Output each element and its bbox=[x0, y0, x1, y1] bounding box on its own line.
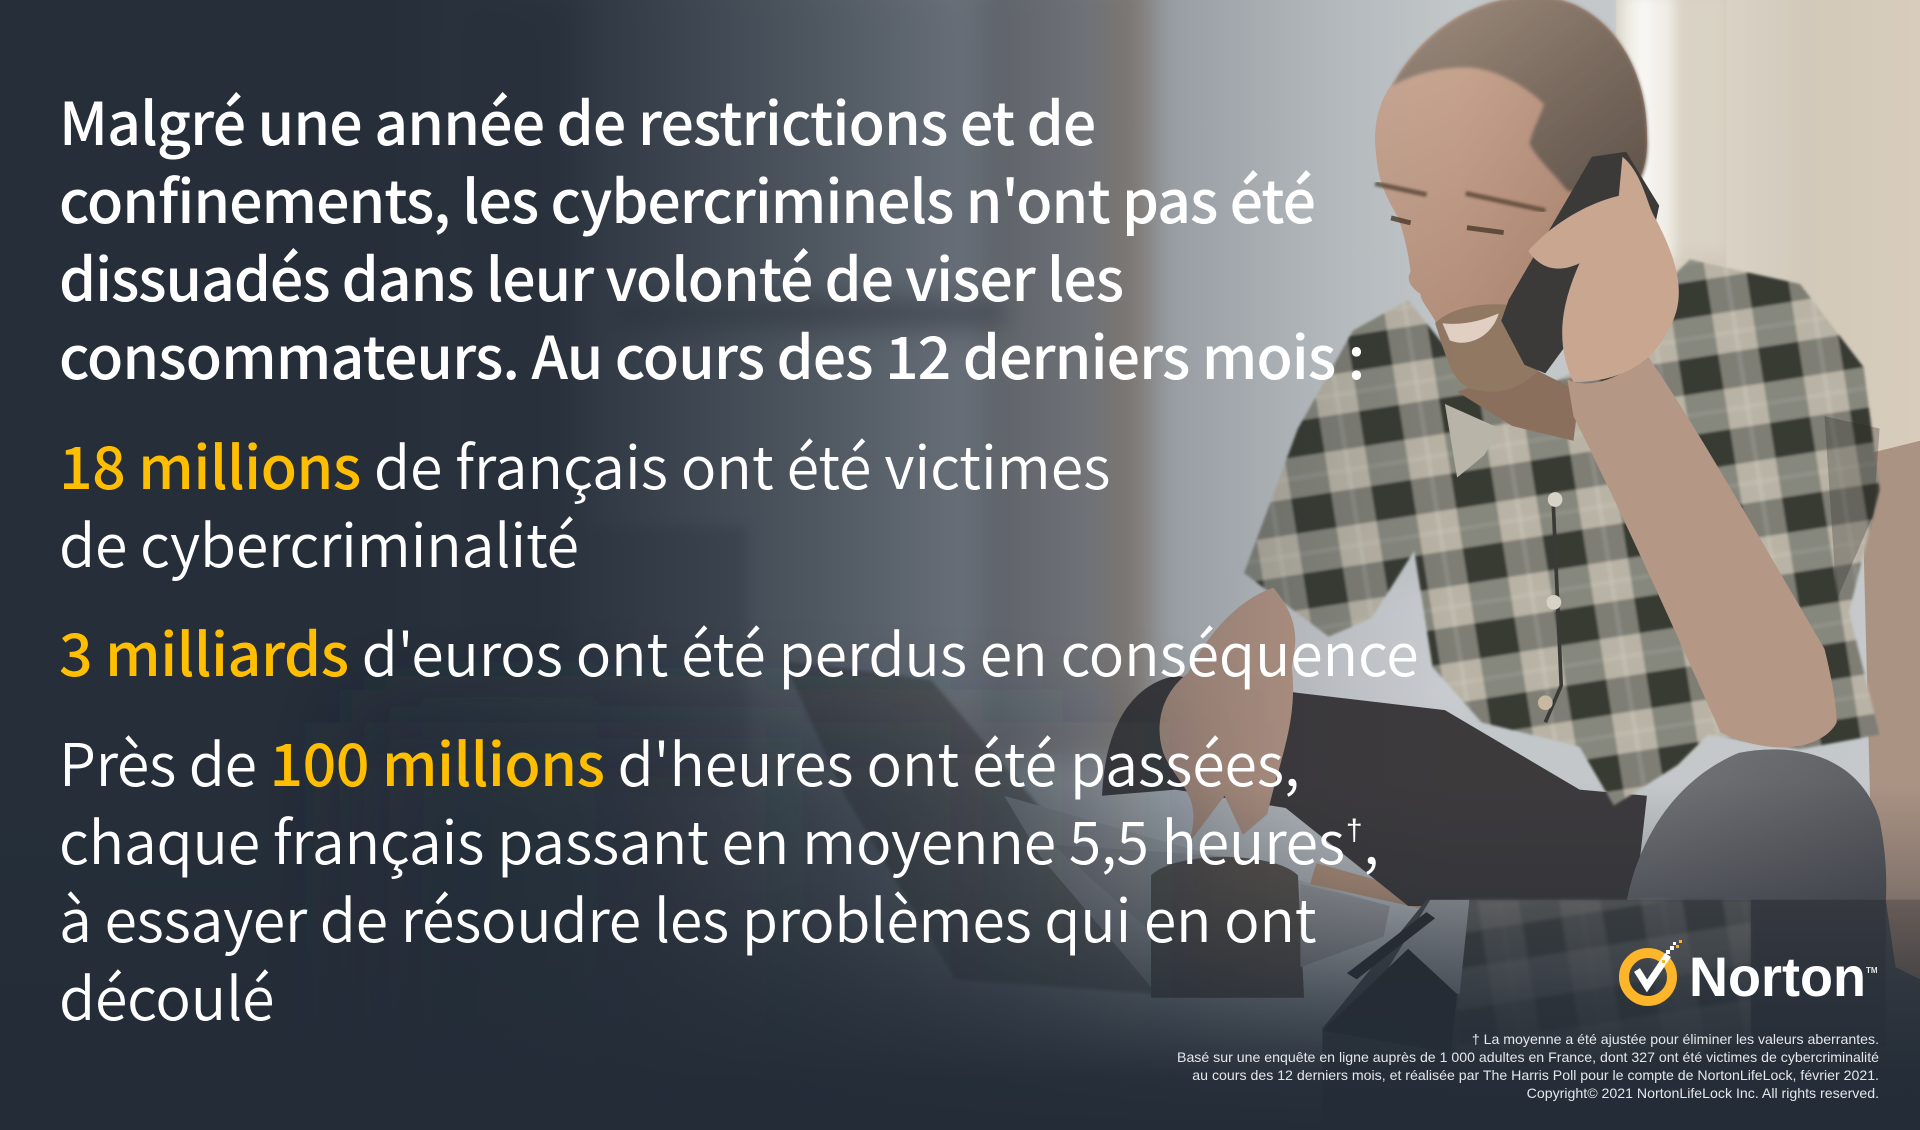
logo wordmark: Norton bbox=[1689, 945, 1866, 1008]
footnotes: Copyright© 2021 NortonLifeLock Inc. All rights reserved. bbox=[1527, 1085, 1879, 1101]
man: phone bbox=[1501, 152, 1659, 373]
text: 18 millions de français ont été victimes bbox=[59, 421, 1110, 506]
logo pixels bbox=[1665, 942, 1676, 959]
logo pixel accents bbox=[1662, 940, 1682, 963]
man: head bbox=[1375, 0, 1647, 392]
laptop and desk bbox=[588, 526, 1439, 998]
glass table with reflection bbox=[1322, 900, 1920, 1130]
text: Près de 100 millions d'heures ont été passées, bbox=[59, 718, 1300, 803]
footnotes bbox=[1177, 1031, 1879, 1101]
stat: 100 millions bbox=[59, 718, 1379, 1037]
man: bare forearms bbox=[1160, 355, 1837, 845]
headline block bbox=[59, 77, 1364, 396]
text: de cybercriminalité bbox=[59, 499, 579, 584]
text: chaque français passant en moyenne 5,5 heures†, bbox=[59, 796, 1379, 881]
man: checked shirt bbox=[1244, 260, 1880, 806]
man: trousers bbox=[1102, 676, 1886, 967]
text: consommateurs. Au cours des 12 derniers mois : bbox=[59, 311, 1364, 396]
logo check mark bbox=[1637, 955, 1668, 986]
trademark: TM bbox=[1866, 966, 1878, 975]
footnotes: † La moyenne a été ajustée pour éliminer les valeurs aberrantes. bbox=[1472, 1031, 1879, 1047]
text: 3 milliards d'euros ont été perdus en conséquence bbox=[59, 608, 1418, 693]
footnotes: Basé sur une enquête en ligne auprès de 1 000 adultes en France, dont 327 ont été victimes de cybercriminalité bbox=[1177, 1049, 1879, 1065]
text: découlé bbox=[59, 952, 274, 1037]
man: neck bbox=[1457, 367, 1580, 441]
text: dissuadés dans leur volonté de viser les bbox=[59, 233, 1123, 318]
footnotes: au cours des 12 derniers mois, et réalisée par The Harris Poll pour le compte de NortonLifeLock, février 2021. bbox=[1192, 1067, 1879, 1083]
stat: 18 millions bbox=[59, 421, 1110, 584]
text: confinements, les cybercriminels n'ont pas été bbox=[59, 155, 1315, 240]
text: Malgré une année de restrictions et de bbox=[59, 77, 1095, 162]
text: à essayer de résoudre les problèmes qui en ont bbox=[59, 874, 1316, 959]
logo ring bbox=[1624, 953, 1672, 1001]
man: hand holding phone bbox=[1528, 157, 1679, 382]
dark overlay: bottom fade bbox=[0, 784, 1920, 1130]
Norton logo bbox=[1619, 940, 1878, 1008]
dark overlay: lower-middle fade bbox=[367, 722, 1224, 1130]
